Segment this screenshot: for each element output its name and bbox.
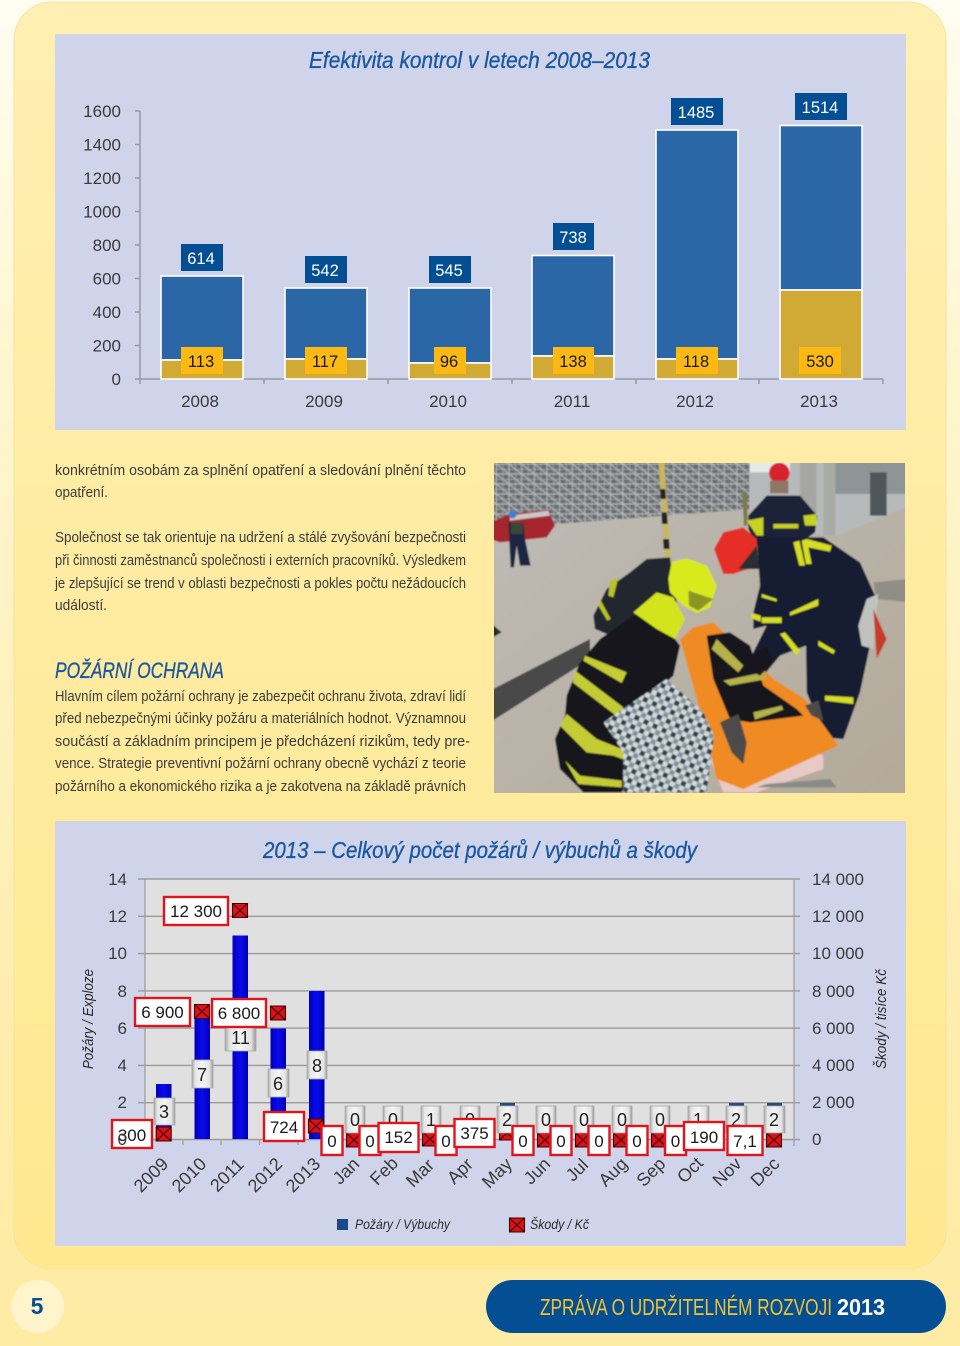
text block: safety trend: Společnost se tak orientuje na udržení a stálé zvyšování bezpečnosti bbox=[55, 530, 466, 546]
bar value labels: 0 bbox=[541, 1110, 551, 1130]
bar value labels: 0 bbox=[388, 1110, 398, 1130]
text block: safety trend: je zlepšující se trend v oblasti bezpečnosti a pokles počtu nežádoucích bbox=[54, 576, 466, 592]
stacked bars bbox=[161, 126, 862, 379]
category labels bbox=[130, 1153, 783, 1196]
damage value callouts: 6 900 bbox=[141, 1003, 184, 1022]
text block: intro continued: konkrétním osobám za splnění opatření a sledování plnění těchto bbox=[55, 463, 466, 479]
right axis labels: 14 000 bbox=[812, 870, 864, 889]
bar value labels: 0 bbox=[617, 1110, 627, 1130]
lower value labels: 118 bbox=[683, 353, 709, 371]
total value labels: 545 bbox=[435, 262, 463, 280]
right axis labels: 12 000 bbox=[812, 907, 864, 926]
right axis labels bbox=[812, 870, 864, 1149]
plot area bbox=[138, 879, 800, 1146]
bar value labels: 2 bbox=[731, 1110, 741, 1130]
lower value labels: 113 bbox=[188, 353, 214, 371]
right axis labels: 4 000 bbox=[812, 1056, 855, 1075]
category labels: Apr bbox=[443, 1154, 477, 1188]
text block: fire protection: vence. Strategie preventivní požární ochrany obecně vychází z teorie bbox=[55, 756, 466, 772]
y axis: 800 bbox=[93, 236, 121, 255]
legend: Požáry / Výbuchy bbox=[355, 1216, 451, 1232]
category labels: 2010 bbox=[168, 1154, 210, 1196]
x axis years bbox=[181, 392, 838, 411]
bar value labels: 0 bbox=[655, 1110, 665, 1130]
panel: fires and damages chart bbox=[55, 821, 906, 1246]
lower value labels: 138 bbox=[559, 353, 587, 371]
bar value labels: 1 bbox=[693, 1110, 703, 1130]
damage value callouts: 375 bbox=[460, 1124, 489, 1143]
damage value callouts: 0 bbox=[556, 1132, 566, 1151]
category labels: Nov bbox=[709, 1154, 745, 1190]
damage value callouts: 12 300 bbox=[170, 902, 222, 921]
damage value callouts: 6 800 bbox=[218, 1004, 260, 1023]
right axis labels: 8 000 bbox=[812, 982, 855, 1001]
total value labels bbox=[181, 93, 847, 283]
damage value callouts: 300 bbox=[118, 1126, 146, 1145]
damage value callouts: 0 bbox=[365, 1132, 375, 1151]
category labels: 2012 bbox=[244, 1154, 286, 1196]
bar value labels: 0 bbox=[465, 1110, 475, 1130]
heading: fire protection: POŽÁRNÍ OCHRANA bbox=[55, 658, 224, 683]
right axis labels: 6 000 bbox=[812, 1019, 855, 1038]
category labels: Oct bbox=[673, 1153, 707, 1187]
footer banner: 2013 bbox=[837, 1294, 885, 1320]
bar value labels bbox=[154, 1023, 785, 1133]
right axis title: Škody / tisíce Kč bbox=[873, 968, 890, 1069]
left axis labels: 2 bbox=[118, 1093, 127, 1112]
damage value callouts: 0 bbox=[671, 1132, 680, 1151]
lower value labels: 117 bbox=[312, 353, 338, 371]
page number badge: 5 bbox=[31, 1293, 44, 1319]
damage value callouts bbox=[112, 897, 762, 1155]
y axis bbox=[83, 102, 883, 389]
category labels: 2011 bbox=[206, 1154, 248, 1196]
y axis: 200 bbox=[93, 336, 121, 356]
left axis title: Požáry / Exploze bbox=[81, 969, 97, 1069]
y axis: 600 bbox=[93, 270, 121, 288]
left axis labels: 8 bbox=[118, 982, 127, 1001]
left axis labels: 14 bbox=[108, 870, 127, 889]
damage value callouts: 0 bbox=[327, 1132, 337, 1151]
category labels: 2013 bbox=[282, 1154, 324, 1196]
bar value labels: 2 bbox=[769, 1110, 779, 1130]
x axis years: 2008 bbox=[181, 392, 219, 411]
text block: fire protection: Hlavním cílem požární ochrany je zabezpečit ochranu života, zdraví lidí bbox=[55, 689, 466, 705]
footer banner bbox=[486, 1280, 946, 1333]
category labels: Jul bbox=[562, 1155, 592, 1185]
text block: intro continued bbox=[55, 463, 466, 501]
x axis years: 2012 bbox=[676, 392, 714, 411]
category labels: Mar bbox=[402, 1155, 438, 1191]
damage value callouts: 7,1 bbox=[733, 1132, 757, 1151]
category labels: May bbox=[478, 1154, 516, 1192]
x axis years: 2010 bbox=[429, 392, 467, 411]
text block: fire protection bbox=[55, 689, 470, 795]
total value labels: 1514 bbox=[802, 99, 838, 117]
damage value callouts: 0 bbox=[441, 1132, 451, 1151]
legend: Škody / Kč bbox=[530, 1216, 589, 1232]
bar value labels: 7 bbox=[197, 1065, 207, 1085]
lower value labels bbox=[181, 347, 841, 374]
y axis: 0 bbox=[112, 370, 121, 389]
bar value labels: 0 bbox=[579, 1110, 589, 1130]
text block: safety trend: při činnosti zaměstnanců společnosti i externích pracovníků. Výsledkem bbox=[55, 553, 466, 569]
category labels: Sep bbox=[633, 1154, 669, 1190]
bar value labels: 11 bbox=[231, 1028, 250, 1048]
total value labels: 542 bbox=[311, 262, 339, 280]
lower value labels: 530 bbox=[806, 353, 834, 371]
total value labels: 1485 bbox=[678, 104, 714, 122]
left axis labels: 6 bbox=[118, 1019, 127, 1038]
y axis: 1600 bbox=[83, 102, 121, 121]
page number badge bbox=[11, 1280, 64, 1333]
bar value labels: 0 bbox=[350, 1110, 360, 1130]
left axis labels: 12 bbox=[108, 907, 127, 926]
damage value callouts: 724 bbox=[270, 1118, 298, 1137]
total value labels: 614 bbox=[187, 250, 215, 268]
lower value labels: 96 bbox=[440, 353, 458, 371]
x axis years: 2013 bbox=[800, 392, 838, 411]
right axis labels: 10 000 bbox=[812, 944, 864, 963]
bar value labels: 6 bbox=[273, 1074, 283, 1094]
damage value callouts: 0 bbox=[594, 1132, 604, 1151]
text block: safety trend bbox=[54, 530, 466, 614]
bar value labels: 8 bbox=[312, 1056, 322, 1076]
text block: intro continued: opatření. bbox=[55, 485, 108, 501]
y axis: 400 bbox=[93, 303, 121, 322]
category labels: Dec bbox=[747, 1154, 783, 1190]
x axis years: 2011 bbox=[554, 392, 590, 411]
total value labels: 738 bbox=[559, 229, 587, 247]
blue bars bbox=[156, 936, 782, 1139]
damage value callouts: 152 bbox=[384, 1128, 413, 1147]
right axis labels: 0 bbox=[812, 1130, 821, 1149]
left axis labels: 10 bbox=[108, 944, 127, 963]
damage value callouts: 0 bbox=[632, 1132, 642, 1151]
bar value labels: 1 bbox=[426, 1110, 436, 1130]
footer banner: ZPRÁVA O UDRŽITELNÉM ROZVOJI bbox=[540, 1294, 832, 1320]
right axis labels: 2 000 bbox=[812, 1093, 855, 1112]
bar value labels: 3 bbox=[159, 1102, 169, 1122]
y axis: 1200 bbox=[83, 169, 121, 188]
category labels: Feb bbox=[366, 1153, 402, 1189]
category labels: Jun bbox=[520, 1154, 554, 1188]
left axis zero label: 0 bbox=[118, 1130, 127, 1149]
text block: safety trend: událostí. bbox=[55, 598, 107, 614]
x axis years: 2009 bbox=[305, 392, 343, 411]
category labels: Jan bbox=[329, 1154, 363, 1188]
y axis: 1000 bbox=[83, 202, 121, 222]
category labels: 2009 bbox=[130, 1154, 172, 1196]
text block: fire protection: požárního a ekonomického rizika a je zakotvena na základě právních bbox=[55, 779, 466, 795]
left axis labels bbox=[108, 870, 127, 1112]
damage value callouts: 0 bbox=[518, 1132, 528, 1151]
y axis: 1400 bbox=[83, 136, 121, 154]
category labels: Aug bbox=[595, 1154, 631, 1190]
left axis labels: 4 bbox=[118, 1056, 127, 1075]
chart title: Efektivita kontrol v letech 2008–2013 bbox=[309, 47, 650, 73]
text block: fire protection: před nebezpečnými účinky požáru a materiálních hodnot. Významnou bbox=[55, 711, 466, 727]
chart title: 2013 – Celkový počet požárů / výbuchů a škody bbox=[262, 837, 698, 863]
legend bbox=[337, 1216, 589, 1232]
bar value labels: 2 bbox=[502, 1110, 512, 1130]
damage value callouts: 190 bbox=[690, 1128, 718, 1147]
panel: inspection effectiveness chart bbox=[55, 34, 906, 430]
text block: fire protection: součástí a základním principem je předcházení rizikům, tedy pre- bbox=[55, 734, 470, 750]
photo: firefighters with rescue stretcher bbox=[494, 463, 905, 793]
damage markers bbox=[156, 904, 781, 1147]
